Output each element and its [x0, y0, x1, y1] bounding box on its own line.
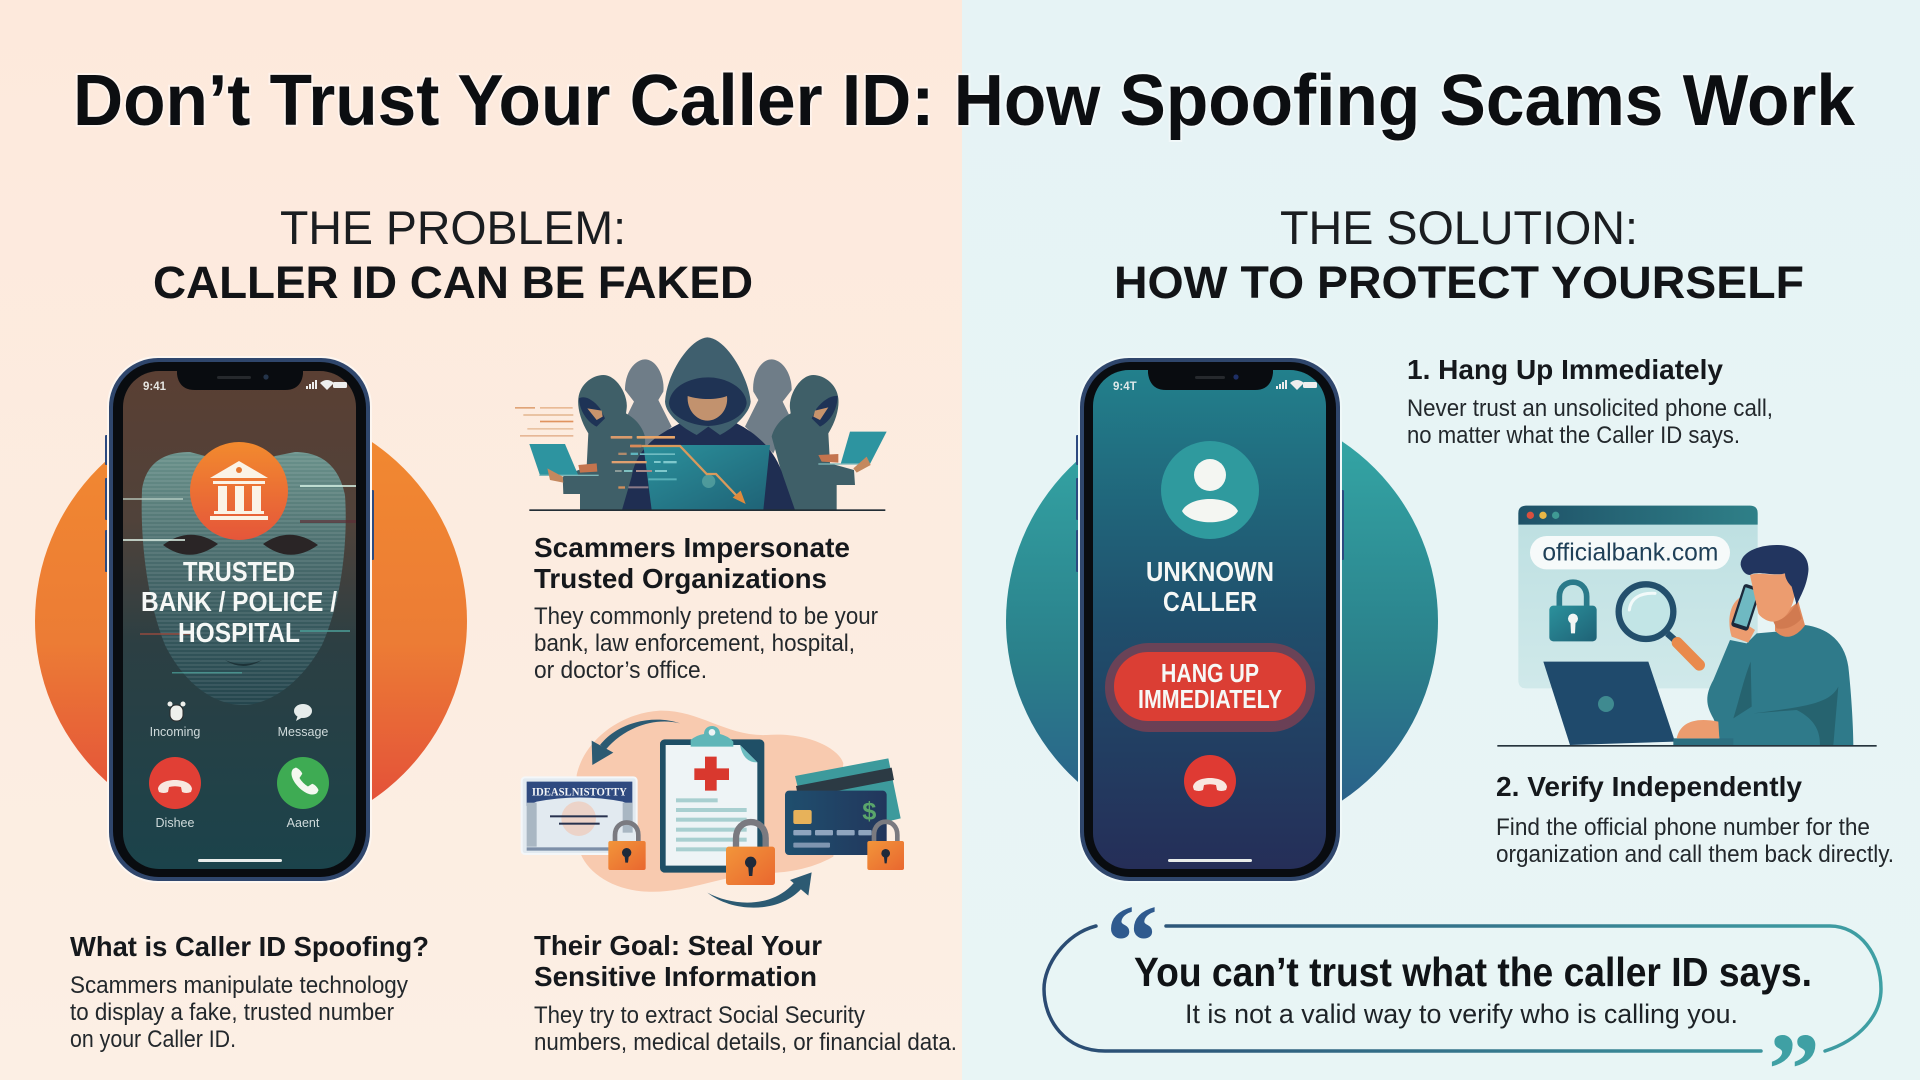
text: scammers impersonate: They commonly pretend to be your [534, 603, 878, 630]
text: scammers impersonate: Scammers Impersonate [534, 532, 850, 563]
status bar: 9:41 [143, 381, 167, 393]
heading: the solution: THE SOLUTION: [1280, 201, 1638, 254]
caller label: HOSPITAL [178, 617, 300, 648]
heading: the problem [153, 201, 753, 308]
right figure with laptop [772, 375, 887, 510]
avatar icon [1161, 441, 1259, 539]
hang up button with glow: IMMEDIATELY [1138, 684, 1282, 714]
caller label: BANK / POLICE / [141, 586, 337, 617]
left figure with laptop [515, 375, 647, 510]
bank icon badge [190, 442, 288, 540]
lock: centre [726, 822, 775, 885]
text: their goal: Their Goal: Steal Your [534, 930, 822, 961]
illustration: verifying official website [1497, 506, 1877, 747]
hang up button with glow [1105, 643, 1315, 732]
caller label: UNKNOWN [1146, 556, 1274, 587]
text: step 2: organization and call them back directly. [1496, 841, 1894, 868]
opening quote mark: “ [1106, 884, 1158, 999]
padlock [1549, 582, 1597, 641]
text: their goal: Sensitive Information [534, 961, 817, 992]
phone: unknown caller [1076, 357, 1344, 882]
accept button: Aaent [287, 816, 320, 830]
browser window: officialbank.com [1542, 540, 1718, 567]
caller label: TRUSTED [183, 556, 295, 587]
text: step 2 [1496, 771, 1894, 868]
quote callout: You can’t trust what the caller ID says. [1134, 949, 1812, 995]
heading: the problem: CALLER ID CAN BE FAKED [153, 257, 753, 308]
heading: the solution [1114, 201, 1804, 308]
illustration: hooded scammers [515, 337, 887, 511]
decline button [149, 757, 201, 830]
text: what is caller id spoofing: on your Caller ID. [70, 1026, 236, 1053]
status bar [1113, 380, 1317, 393]
text: step 1 [1407, 354, 1773, 449]
background: solution side [962, 0, 1920, 1080]
text: step 1: 1. Hang Up Immediately [1407, 354, 1723, 385]
text: scammers impersonate: or doctor’s office. [534, 657, 707, 684]
title: Don’t Trust Your Caller ID: How Spoofing Scams Work [73, 61, 1856, 141]
centre hooded figure with laptop [611, 337, 795, 510]
caller label [1146, 556, 1274, 617]
phone: spoofed incoming call [105, 357, 374, 882]
hang up button with glow: HANG UP [1161, 658, 1259, 688]
text: their goal [534, 930, 957, 1056]
accept button [277, 757, 329, 830]
quote callout [1044, 884, 1881, 1080]
caller label [141, 556, 337, 648]
credit cards: $ [862, 797, 876, 825]
text: what is caller id spoofing: to display a fake, trusted number [70, 999, 394, 1026]
social security card: IDEASLNISTOTTY [532, 787, 627, 799]
arrow: top [592, 720, 680, 765]
message option [278, 704, 328, 739]
lock: right [867, 822, 904, 870]
person on phone [1707, 545, 1853, 745]
heading: the problem: THE PROBLEM: [280, 201, 626, 254]
status bar [143, 380, 347, 393]
incoming option [150, 702, 200, 739]
text: their goal: numbers, medical details, or financial data. [534, 1029, 957, 1056]
text: step 1: Never trust an unsolicited phone call, [1407, 395, 1773, 422]
text: scammers impersonate: Trusted Organizations [534, 563, 827, 594]
browser window [1518, 506, 1758, 688]
teal circle behind phone [1006, 405, 1438, 837]
magnifying glass [1619, 584, 1699, 665]
glitching mask [123, 452, 356, 705]
decline button [1184, 755, 1236, 807]
text: what is caller id spoofing: What is Caller ID Spoofing? [70, 931, 429, 962]
laptop [1543, 662, 1733, 745]
social security card [522, 777, 637, 854]
heading: the solution: HOW TO PROTECT YOURSELF [1114, 257, 1804, 308]
text: step 1: no matter what the Caller ID says. [1407, 422, 1740, 449]
text: scammers impersonate [534, 532, 878, 684]
background: problem side [0, 0, 962, 1080]
incoming option: Incoming [150, 725, 200, 739]
message option: Message [278, 725, 328, 739]
decline button: Dishee [156, 816, 194, 830]
text: what is caller id spoofing: Scammers manipulate technology [70, 972, 408, 999]
medical clipboard [660, 726, 764, 873]
quote callout: It is not a valid way to verify who is calling you. [1185, 999, 1738, 1029]
arrow: bottom [707, 872, 812, 908]
lock: left [608, 822, 646, 870]
caller label: CALLER [1163, 586, 1257, 617]
illustration: sensitive documents [522, 711, 904, 908]
status bar: 9:4T [1113, 381, 1137, 393]
credit cards [785, 758, 901, 855]
text: what is caller id spoofing [70, 931, 429, 1053]
text: step 2: Find the official phone number for the [1496, 814, 1870, 841]
text: step 2: 2. Verify Independently [1496, 771, 1802, 802]
text: their goal: They try to extract Social Security [534, 1002, 865, 1029]
text: scammers impersonate: bank, law enforcement, hospital, [534, 630, 855, 657]
orange circle behind phone [35, 405, 467, 837]
